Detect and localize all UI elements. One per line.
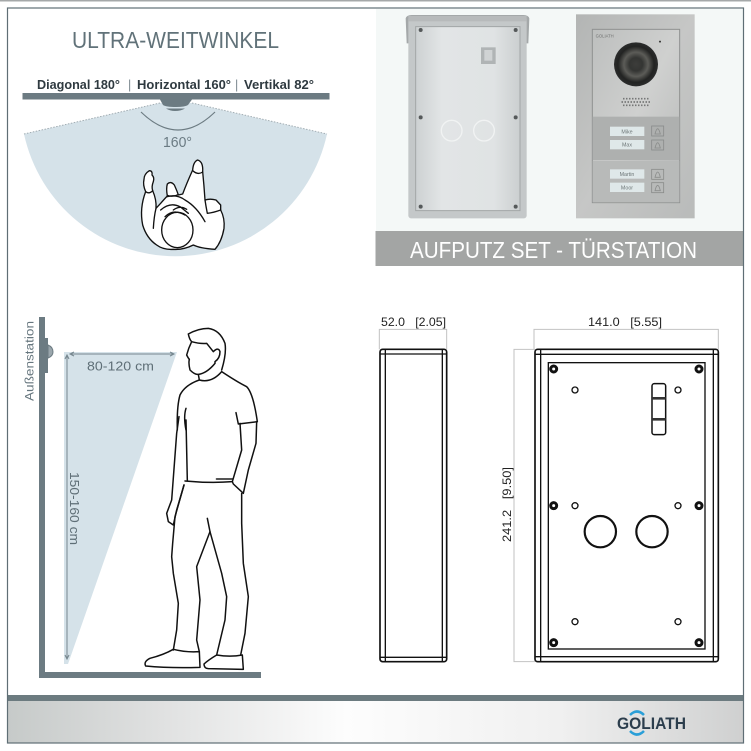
small holes [572, 387, 681, 625]
panel: surface mount set photos [406, 14, 695, 218]
tiny brand mark: GOLIATH [596, 34, 614, 39]
angle arc [141, 112, 215, 130]
wall and floor [39, 317, 261, 678]
name plates [610, 127, 644, 192]
banner: AUFPUTZ SET - TÜRSTATION [410, 237, 697, 263]
field of view dotted edges [24, 103, 327, 134]
person standing [145, 328, 257, 669]
banner [376, 231, 743, 266]
dimension label: side width: 52.0 [2.05] [381, 315, 446, 329]
field of view sector [24, 103, 327, 256]
mounting screws [551, 366, 702, 646]
panel: ultra wide angle diagram [22, 27, 330, 256]
title: ULTRA-WEITWINKEL [72, 27, 279, 53]
photo: surface mount housing [406, 15, 529, 218]
dimension lines [379, 329, 718, 662]
logo: Goliath: GOLIATH [617, 715, 686, 733]
cable openings [585, 516, 668, 547]
front view [535, 349, 718, 662]
speaker grille [622, 99, 652, 105]
panel: product photo background [376, 9, 743, 231]
icon: outdoor station on wall [45, 338, 53, 373]
name plates: Moor [621, 185, 633, 191]
angle label: 160° [163, 135, 192, 151]
name plates: Mike [621, 129, 633, 135]
bell buttons [652, 126, 664, 193]
viewing angle specs: | [128, 78, 131, 92]
torso, legs and shoes [145, 417, 257, 669]
height arrow [65, 355, 69, 659]
name plates: Max [622, 143, 632, 149]
head and shoulders [177, 328, 257, 430]
label: width: 80-120 cm [87, 358, 154, 374]
name plates: Martin [620, 172, 634, 178]
icon: camera lens [614, 42, 658, 86]
dimension label: front height: 241.2 [9.50] [500, 467, 514, 542]
person seen from above [142, 160, 224, 249]
side view [380, 349, 447, 662]
label: outdoor station: Außenstation [24, 321, 36, 401]
viewing angle specs: Vertikal 82° [244, 78, 314, 92]
dimension label: front width: 141.0 [5.55] [588, 315, 662, 329]
photo: door station [576, 14, 695, 218]
wall bar [22, 93, 330, 100]
viewing angle specs: Diagonal 180° [37, 78, 120, 92]
panel: technical drawings [379, 329, 718, 662]
label: height: 150-160 cm [67, 472, 82, 545]
panel: mounting height diagram [24, 317, 261, 678]
viewing angle specs: Horizontal 160° [137, 78, 231, 92]
viewing angle specs [37, 78, 314, 92]
icon: camera [160, 100, 192, 111]
cable slot [652, 384, 666, 435]
width arrow [70, 352, 174, 356]
viewing angle specs: | [235, 78, 238, 92]
viewing triangle [64, 352, 177, 664]
footer [8, 695, 743, 743]
